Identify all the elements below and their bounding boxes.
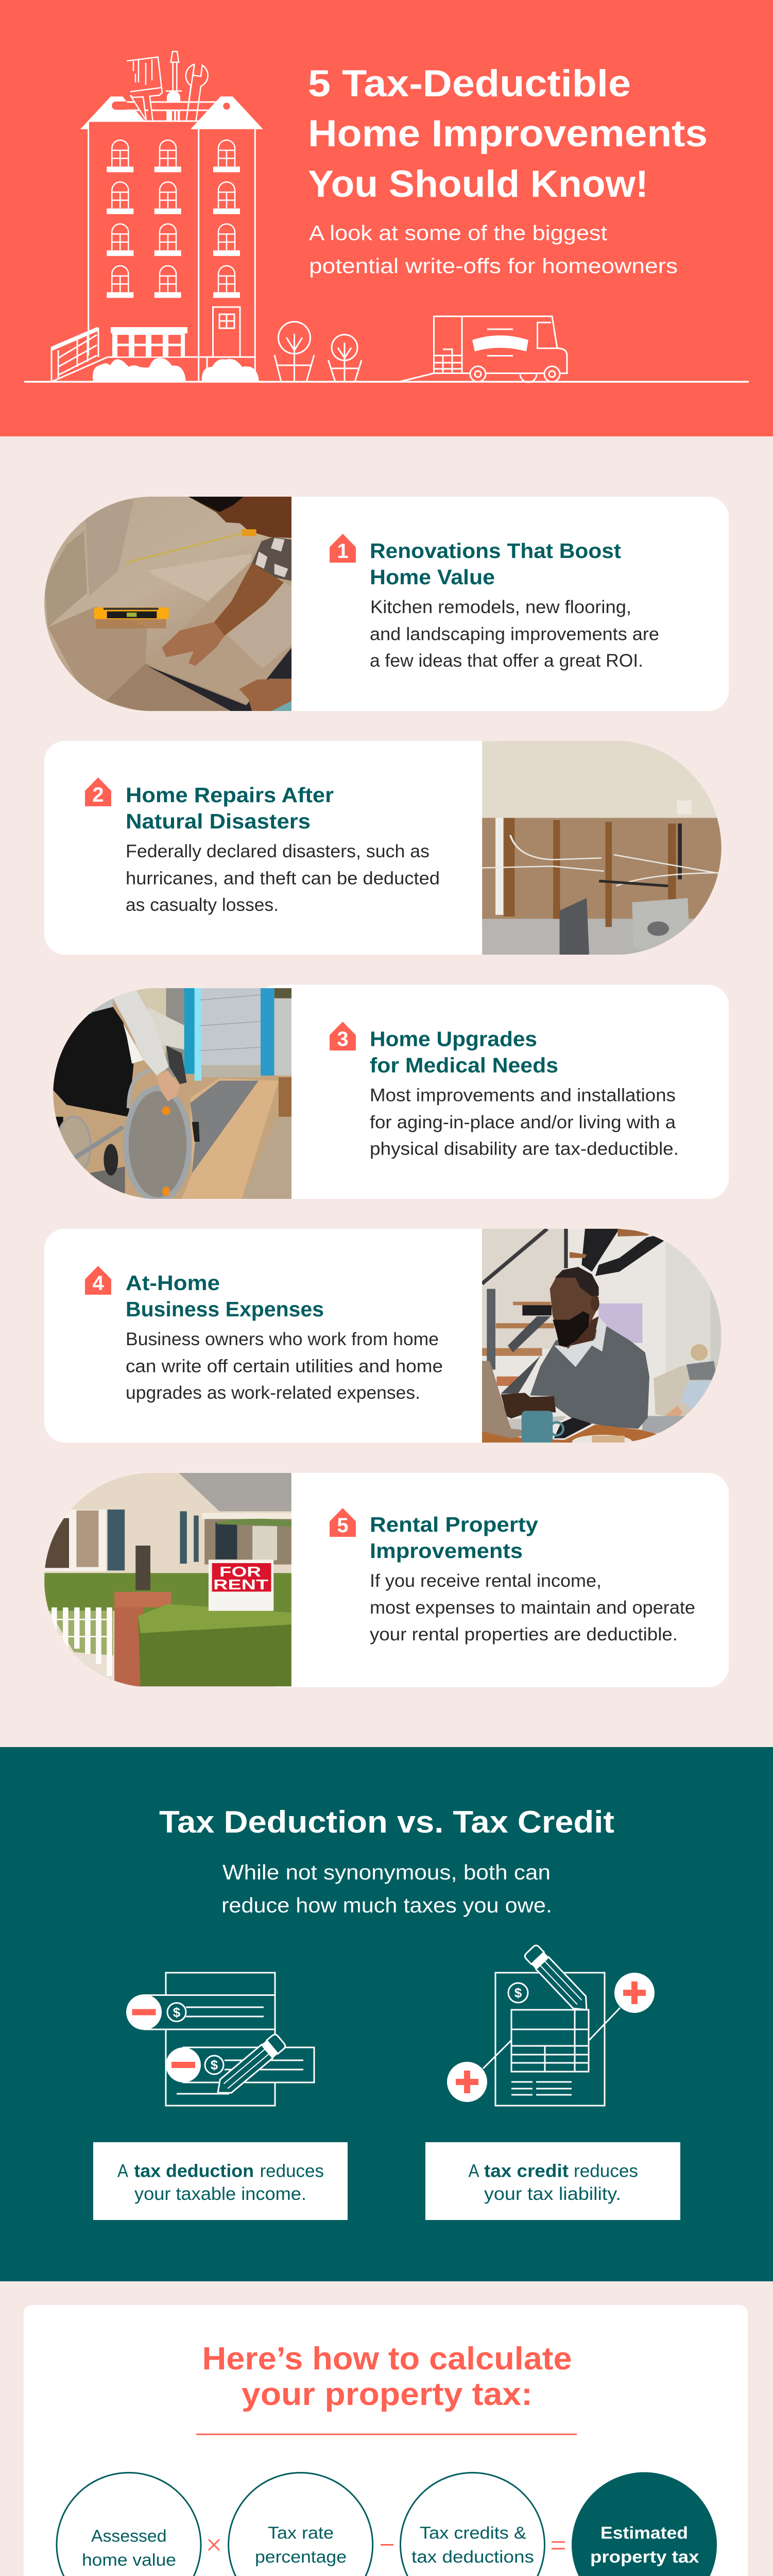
intro text: [221, 1860, 552, 1917]
photo: gutted wall: [482, 741, 729, 955]
formula circle: tax credits and deductions: Tax credits &: [420, 2523, 526, 2542]
panel: item 2 disasters: [44, 741, 729, 955]
formula circle: estimated property tax: property tax: [590, 2547, 699, 2566]
heading: your property tax:: [242, 2377, 532, 2412]
body text: a few ideas that offer a great ROI.: [370, 651, 643, 671]
body text: Most improvements and installations: [370, 1085, 676, 1106]
formula circle: tax rate percentage: percentage: [255, 2547, 347, 2566]
heading: [202, 2341, 572, 2412]
body text: [126, 1329, 443, 1403]
body text: for aging-in-place and/or living with a: [370, 1112, 676, 1132]
heading: [126, 783, 334, 833]
icon: tax credit form: [447, 1944, 655, 2106]
formula circle: assessed home value: Assessed: [91, 2527, 167, 2545]
formula circle: tax rate percentage: [229, 2473, 373, 2576]
heading: At-Home: [126, 1271, 220, 1295]
formula circle: tax credits and deductions: [401, 2473, 545, 2576]
subtitle: [309, 221, 678, 278]
body text: can write off certain utilities and home: [126, 1356, 443, 1377]
panel: item 1 renovations: [44, 497, 729, 711]
callout: tax deduction: tax deduction: [134, 2161, 254, 2181]
heading: Renovations That Boost: [370, 539, 621, 563]
body text: your rental properties are deductible.: [370, 1624, 678, 1645]
callout: tax deduction: reduces: [260, 2161, 324, 2181]
badge: number 2: [85, 777, 111, 806]
heading: [370, 1513, 538, 1563]
photo: for rent house: FOR: [219, 1564, 261, 1580]
illustration: bushes: [93, 358, 259, 382]
photo: for rent house: [44, 1472, 291, 1686]
callout: tax credit: tax credit: [484, 2161, 569, 2181]
illustration: tools on roof: [127, 52, 216, 121]
body text: physical disability are tax-deductible.: [370, 1139, 679, 1159]
heading: [370, 539, 621, 589]
photo: for rent house: RENT: [213, 1577, 268, 1592]
heading: [370, 1027, 558, 1077]
callout: tax deduction: [93, 2142, 348, 2220]
body text: upgrades as work-related expenses.: [126, 1383, 420, 1403]
heading: [126, 1271, 324, 1321]
formula circle: assessed home value: [57, 2473, 201, 2576]
operator: minus: [381, 2544, 393, 2546]
intro text: While not synonymous, both can: [222, 1860, 551, 1884]
icon: tax deduction form: [126, 1973, 314, 2106]
formula circle: tax credits and deductions: tax deductions: [411, 2547, 534, 2566]
badge: number 3: [330, 1022, 356, 1050]
heading: Improvements: [370, 1539, 523, 1563]
heading: Here’s how to calculate: [202, 2341, 572, 2377]
badge: number 2: 2: [92, 784, 104, 806]
title: You Should Know!: [308, 163, 648, 205]
body text: Federally declared disasters, such as: [126, 841, 430, 861]
illustration: delivery truck: [399, 316, 567, 382]
heading: Natural Disasters: [126, 809, 311, 833]
panel: header: [0, 0, 773, 436]
photo: man at laptop: [482, 1229, 729, 1449]
body text: most expenses to maintain and operate: [370, 1598, 695, 1618]
heading: Home Repairs After: [126, 783, 334, 807]
body text: as casualty losses.: [126, 895, 279, 915]
illustration: potted trees: [274, 321, 362, 382]
panel: item 4 business: [44, 1229, 729, 1449]
callout: tax credit: A: [469, 2161, 479, 2181]
windows: [107, 140, 240, 172]
heading: Tax Deduction vs. Tax Credit: [159, 1805, 614, 1839]
formula circle: assessed home value: home value: [82, 2550, 176, 2569]
formula circle: tax rate percentage: Tax rate: [268, 2523, 334, 2542]
panel: tax deduction vs tax credit: [0, 1747, 773, 2281]
panel: property tax calculation: [24, 2305, 748, 2576]
icon: tax deduction form: $: [173, 2005, 181, 2020]
callout: tax credit: reduces: [574, 2161, 638, 2181]
heading: Business Expenses: [126, 1297, 324, 1321]
illustration: apartment building: [80, 96, 263, 382]
subtitle: A look at some of the biggest: [309, 221, 608, 245]
heading: Home Upgrades: [370, 1027, 537, 1051]
operator: times: [209, 2539, 219, 2550]
subtitle: potential write-offs for homeowners: [309, 254, 678, 278]
formula circle: estimated property tax: Estimated: [600, 2523, 688, 2542]
title: Home Improvements: [308, 113, 708, 155]
intro text: reduce how much taxes you owe.: [221, 1893, 552, 1917]
heading: Rental Property: [370, 1513, 538, 1536]
panel: item 5 rental: [44, 1472, 729, 1687]
body text: [370, 1571, 695, 1645]
icon: tax deduction form: $: [211, 2057, 218, 2073]
body text: hurricanes, and theft can be deducted: [126, 869, 440, 888]
badge: number 4: 4: [92, 1272, 104, 1295]
body text: [370, 597, 659, 671]
badge: number 1: 1: [337, 540, 349, 563]
badge: number 1: [330, 534, 356, 563]
heading: for Medical Needs: [370, 1053, 558, 1077]
heading: Home Value: [370, 565, 495, 589]
badge: number 5: [330, 1508, 356, 1537]
photo: floor installation: [44, 497, 291, 711]
body text: Business owners who work from home: [126, 1329, 439, 1349]
title: 5 Tax-Deductible: [308, 63, 631, 105]
photo: wheelchair ramp: [44, 985, 291, 1200]
callout: tax deduction: your taxable income.: [134, 2184, 306, 2204]
formula circle: estimated property tax: [572, 2472, 717, 2576]
panel: item 3 medical: [44, 985, 729, 1200]
body text: [370, 1085, 679, 1159]
badge: number 3: 3: [337, 1028, 349, 1050]
body text: and landscaping improvements are: [370, 624, 659, 644]
callout: tax credit: [425, 2142, 680, 2220]
body text: [126, 841, 440, 915]
badge: number 4: [85, 1266, 111, 1295]
callout: tax credit: your tax liability.: [484, 2184, 621, 2204]
title: [308, 63, 708, 205]
illustration: ground line: [24, 381, 749, 383]
body text: If you receive rental income,: [370, 1571, 602, 1591]
operator: equals: [552, 2542, 565, 2549]
illustration: railing: [51, 329, 108, 382]
badge: number 5: 5: [337, 1514, 349, 1537]
icon: tax credit form: $: [514, 1985, 522, 2001]
callout: tax deduction: A: [117, 2161, 129, 2181]
body text: Kitchen remodels, new flooring,: [370, 597, 631, 617]
